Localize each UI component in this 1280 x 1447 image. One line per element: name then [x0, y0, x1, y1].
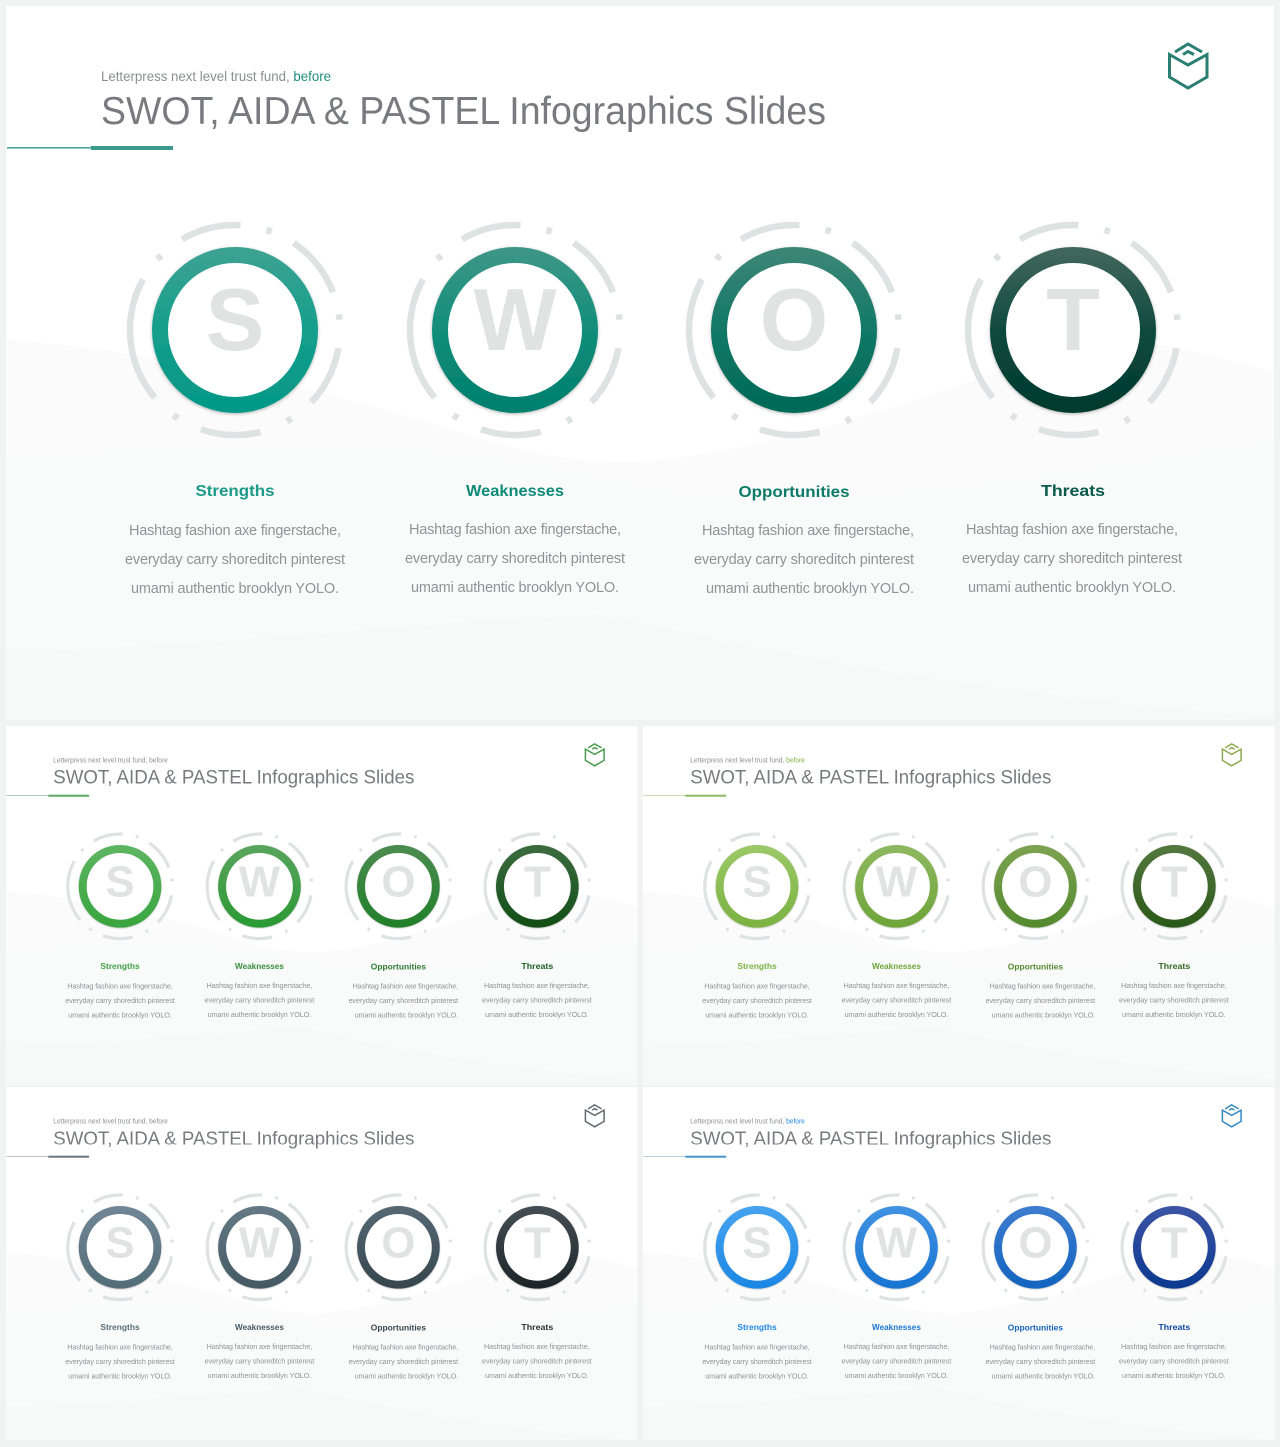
text block: Opportunities: Opportunities: [371, 1324, 427, 1333]
ring: W: W: [876, 857, 918, 906]
text block: Strengths: Hashtag fashion axe fingerstache,: [129, 523, 341, 539]
text block: Strengths: Strengths: [737, 962, 777, 971]
text block: Weaknesses: Hashtag fashion axe fingerstache,: [207, 981, 312, 990]
text block: Strengths: Hashtag fashion axe fingerstache,: [67, 1342, 173, 1351]
title: SWOT, AIDA & PASTEL Infographics Slides: [690, 1128, 1051, 1150]
text block: Strengths: [125, 483, 345, 597]
text block: Opportunities: umami authentic brooklyn YOLO.: [355, 1371, 458, 1380]
text block: Weaknesses: Weaknesses: [235, 1323, 284, 1332]
title underline: [7, 146, 173, 150]
text block: Opportunities: everyday carry shoreditch pinterest: [986, 996, 1095, 1005]
icon: cube logo: [1222, 744, 1241, 766]
text block: Weaknesses: umami authentic brooklyn YOLO.: [208, 1010, 311, 1019]
text block: Weaknesses: [405, 483, 625, 596]
text block: Strengths: everyday carry shoreditch pinterest: [65, 996, 175, 1005]
title: SWOT, AIDA & PASTEL Infographics Slides: [53, 1128, 414, 1150]
text block: Weaknesses: umami authentic brooklyn YOLO.: [411, 580, 619, 596]
ring: T: T: [524, 857, 551, 906]
ring: T: [466, 1176, 609, 1319]
text block: Weaknesses: [842, 1323, 951, 1380]
text block: Weaknesses: umami authentic brooklyn YOLO.: [208, 1371, 311, 1380]
text block: Strengths: Hashtag fashion axe fingerstache,: [67, 981, 173, 990]
text block: Strengths: Strengths: [737, 1323, 777, 1332]
ring: T: T: [1046, 270, 1100, 369]
subtitle: Letterpress next level trust fund, before: [101, 68, 331, 84]
text block: Opportunities: Hashtag fashion axe fingerstache,: [990, 1342, 1095, 1351]
text block: Weaknesses: Hashtag fashion axe fingerstache,: [844, 981, 949, 990]
text block: Strengths: everyday carry shoreditch pinterest: [702, 996, 812, 1005]
text block: Threats: [482, 1323, 592, 1380]
ring: T: T: [524, 1218, 551, 1267]
ring: W: W: [239, 1218, 281, 1267]
panel: lime slide: [643, 726, 1274, 1085]
text block: Threats: [962, 483, 1182, 596]
text block: Threats: Threats: [521, 1323, 554, 1332]
text block: Threats: everyday carry shoreditch pinterest: [1119, 1356, 1229, 1365]
text block: Opportunities: Hashtag fashion axe fingerstache,: [990, 981, 1095, 990]
text block: Threats: [1119, 1323, 1229, 1380]
text block: Opportunities: [349, 1324, 458, 1380]
text block: Strengths: umami authentic brooklyn YOLO.: [705, 1010, 809, 1019]
title underline: [6, 795, 89, 797]
text block: Strengths: Strengths: [100, 962, 140, 971]
text block: Threats: everyday carry shoreditch pinterest: [962, 551, 1182, 567]
icon: cube logo: [585, 744, 604, 766]
text block: Weaknesses: Weaknesses: [872, 1323, 921, 1332]
ring: O: [964, 1176, 1107, 1319]
text block: Weaknesses: everyday carry shoreditch pinterest: [405, 551, 625, 567]
text block: Opportunities: Hashtag fashion axe fingerstache,: [353, 1342, 458, 1351]
text block: Opportunities: Opportunities: [1008, 1324, 1064, 1333]
panel: main teal slide: [6, 6, 1274, 720]
icon: cube logo: [1170, 44, 1207, 88]
text block: Weaknesses: everyday carry shoreditch pinterest: [205, 1356, 314, 1365]
text block: Threats: Threats: [1041, 483, 1105, 500]
ring: T: [1103, 1176, 1246, 1319]
ring: W: [372, 187, 658, 473]
text block: Threats: everyday carry shoreditch pinterest: [482, 995, 592, 1004]
text block: Opportunities: everyday carry shoreditch pinterest: [349, 1357, 458, 1366]
ring: T: [1103, 815, 1246, 958]
text block: Opportunities: [694, 484, 914, 597]
text block: Strengths: umami authentic brooklyn YOLO.: [705, 1371, 809, 1380]
ring: W: W: [473, 270, 557, 369]
text block: Weaknesses: Hashtag fashion axe fingerstache,: [207, 1342, 312, 1351]
text block: Opportunities: [986, 963, 1095, 1019]
text block: Weaknesses: Weaknesses: [872, 962, 921, 971]
text block: Opportunities: [986, 1324, 1095, 1380]
text block: Strengths: umami authentic brooklyn YOLO.: [68, 1371, 172, 1380]
panel: green slide: [6, 726, 637, 1085]
text block: Strengths: everyday carry shoreditch pinterest: [702, 1357, 812, 1366]
icon: cube logo: [585, 1105, 604, 1127]
text block: Opportunities: everyday carry shoreditch pinterest: [694, 552, 914, 568]
text block: Opportunities: umami authentic brooklyn YOLO.: [706, 581, 914, 597]
text block: Threats: everyday carry shoreditch pinterest: [482, 1356, 592, 1365]
text block: Opportunities: umami authentic brooklyn YOLO.: [992, 1371, 1095, 1380]
text block: Threats: umami authentic brooklyn YOLO.: [1122, 1371, 1226, 1380]
text block: Strengths: [702, 1323, 812, 1380]
text block: Strengths: [702, 962, 812, 1019]
text block: Opportunities: [349, 963, 458, 1019]
ring: S: [49, 1176, 191, 1319]
ring: O: O: [760, 270, 828, 369]
title underline: [6, 1156, 89, 1158]
text block: Opportunities: Hashtag fashion axe fingerstache,: [702, 523, 914, 539]
ring: W: [825, 815, 968, 958]
text block: Strengths: everyday carry shoreditch pinterest: [65, 1357, 175, 1366]
ring: O: O: [1018, 857, 1052, 906]
text block: Threats: [1119, 962, 1229, 1019]
text block: Weaknesses: [842, 962, 951, 1019]
text block: Threats: Hashtag fashion axe fingerstache,: [966, 522, 1178, 538]
text block: Opportunities: umami authentic brooklyn YOLO.: [355, 1010, 458, 1019]
subtitle: Letterpress next level trust fund, before: [690, 1118, 805, 1125]
text block: Strengths: everyday carry shoreditch pinterest: [125, 552, 345, 568]
text block: Threats: Threats: [1158, 1323, 1191, 1332]
text block: Threats: umami authentic brooklyn YOLO.: [1122, 1010, 1226, 1019]
ring: S: [92, 187, 378, 473]
panel: slate slide: [6, 1087, 637, 1440]
text block: Opportunities: everyday carry shoreditch pinterest: [986, 1357, 1095, 1366]
icon: cube logo: [1222, 1105, 1241, 1127]
text block: Opportunities: Opportunities: [1008, 963, 1064, 972]
subtitle: Letterpress next level trust fund, before: [53, 1118, 168, 1125]
text block: Threats: [482, 962, 592, 1019]
ring: T: [930, 187, 1216, 473]
text block: Opportunities: umami authentic brooklyn YOLO.: [992, 1010, 1095, 1019]
subtitle: Letterpress next level trust fund, before: [690, 757, 805, 764]
text block: Strengths: Strengths: [196, 483, 275, 500]
ring: O: O: [1018, 1218, 1052, 1267]
ring: O: [651, 187, 937, 473]
text block: Opportunities: Opportunities: [371, 963, 427, 972]
text block: Strengths: Strengths: [100, 1323, 140, 1332]
ring: W: W: [239, 857, 281, 906]
text block: Threats: Threats: [1158, 962, 1191, 971]
text block: Threats: Hashtag fashion axe fingerstache,: [1121, 1342, 1227, 1351]
ring: O: [327, 1176, 470, 1319]
ring: S: S: [105, 1218, 135, 1267]
text block: Weaknesses: everyday carry shoreditch pinterest: [842, 995, 951, 1004]
ring: O: [964, 815, 1107, 958]
text block: Weaknesses: umami authentic brooklyn YOLO.: [845, 1371, 948, 1380]
text block: Threats: umami authentic brooklyn YOLO.: [485, 1371, 589, 1380]
ring: S: S: [206, 270, 264, 369]
text block: Threats: umami authentic brooklyn YOLO.: [485, 1010, 589, 1019]
title: SWOT, AIDA & PASTEL Infographics Slides: [101, 90, 826, 133]
text block: Opportunities: everyday carry shoreditch pinterest: [349, 996, 458, 1005]
text block: Opportunities: Hashtag fashion axe fingerstache,: [353, 981, 458, 990]
title underline: [643, 1156, 726, 1158]
text block: Threats: Hashtag fashion axe fingerstache,: [484, 981, 590, 990]
text block: Strengths: Hashtag fashion axe fingerstache,: [704, 1342, 810, 1351]
text block: Threats: Hashtag fashion axe fingerstache,: [1121, 981, 1227, 990]
text block: Weaknesses: umami authentic brooklyn YOLO.: [845, 1010, 948, 1019]
text block: Weaknesses: Weaknesses: [466, 483, 564, 500]
ring: O: [327, 815, 470, 958]
text block: Weaknesses: [205, 1323, 314, 1380]
text block: Weaknesses: everyday carry shoreditch pinterest: [205, 995, 314, 1004]
panel: blue slide: [643, 1087, 1274, 1440]
text block: Opportunities: Opportunities: [738, 484, 850, 501]
ring: O: O: [381, 857, 415, 906]
title: SWOT, AIDA & PASTEL Infographics Slides: [53, 767, 414, 789]
ring: S: [49, 815, 191, 958]
ring: W: [188, 815, 331, 958]
text block: Strengths: umami authentic brooklyn YOLO.: [131, 581, 339, 597]
text block: Strengths: [65, 962, 175, 1019]
text block: Threats: Threats: [521, 962, 554, 971]
title: SWOT, AIDA & PASTEL Infographics Slides: [690, 767, 1051, 789]
ring: W: [188, 1176, 331, 1319]
text block: Weaknesses: [205, 962, 314, 1019]
text block: Strengths: Hashtag fashion axe fingerstache,: [704, 981, 810, 990]
ring: S: S: [742, 1218, 772, 1267]
ring: S: [686, 1176, 828, 1319]
ring: S: [686, 815, 828, 958]
title underline: [643, 795, 726, 797]
subtitle: Letterpress next level trust fund, before: [53, 757, 168, 764]
ring: S: S: [105, 857, 135, 906]
text block: Weaknesses: everyday carry shoreditch pinterest: [842, 1356, 951, 1365]
text block: Weaknesses: Hashtag fashion axe fingerstache,: [409, 522, 621, 538]
text block: Threats: Hashtag fashion axe fingerstache,: [484, 1342, 590, 1351]
ring: T: T: [1161, 857, 1188, 906]
text block: Weaknesses: Weaknesses: [235, 962, 284, 971]
ring: O: O: [381, 1218, 415, 1267]
ring: T: [466, 815, 609, 958]
ring: S: S: [742, 857, 772, 906]
text block: Threats: umami authentic brooklyn YOLO.: [968, 580, 1176, 596]
text block: Strengths: [65, 1323, 175, 1380]
text block: Threats: everyday carry shoreditch pinterest: [1119, 995, 1229, 1004]
ring: W: W: [876, 1218, 918, 1267]
ring: T: T: [1161, 1218, 1188, 1267]
text block: Strengths: umami authentic brooklyn YOLO.: [68, 1010, 172, 1019]
text block: Weaknesses: Hashtag fashion axe fingerstache,: [844, 1342, 949, 1351]
ring: W: [825, 1176, 968, 1319]
